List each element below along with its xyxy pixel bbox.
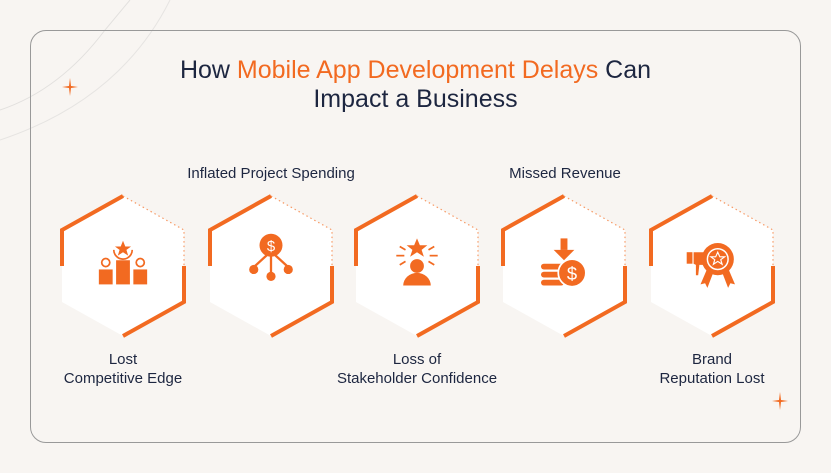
label: Brand Reputation Lost [659,351,765,387]
label: Missed Revenue: Missed Revenue [509,165,621,182]
label: Lost Competitive Edge [64,351,182,387]
hexagon 2: money network icon: $ [267,238,276,255]
label: Lost Competitive Edge: Lost [109,351,137,368]
title: How Mobile App Development Delays Can [180,56,651,84]
label: Brand Reputation Lost: Brand [692,351,732,368]
hexagon 5: badge thumbs down icon [651,196,773,336]
label: Loss of Stakeholder Confidence: Stakeholder Confidence [337,370,497,387]
hexagon 3: person star icon [356,196,478,336]
label: Brand Reputation Lost: Reputation Lost [659,370,765,387]
icon: sparkle left [62,78,78,96]
label: Loss of Stakeholder Confidence [337,351,497,387]
hexagon 2: money network icon [210,196,332,336]
title [180,56,651,113]
label: Lost Competitive Edge: Competitive Edge [64,370,182,387]
title: Impact a Business [313,85,518,113]
hexagon 1: podium icon [62,196,184,336]
icon: sparkle right [772,392,788,410]
hexagon 4: revenue down icon [503,196,625,336]
label: Inflated Project Spending: Inflated Project Spending [187,165,355,182]
hexagon 4: revenue down icon: $ [567,263,577,284]
label: Loss of Stakeholder Confidence: Loss of [393,351,441,368]
